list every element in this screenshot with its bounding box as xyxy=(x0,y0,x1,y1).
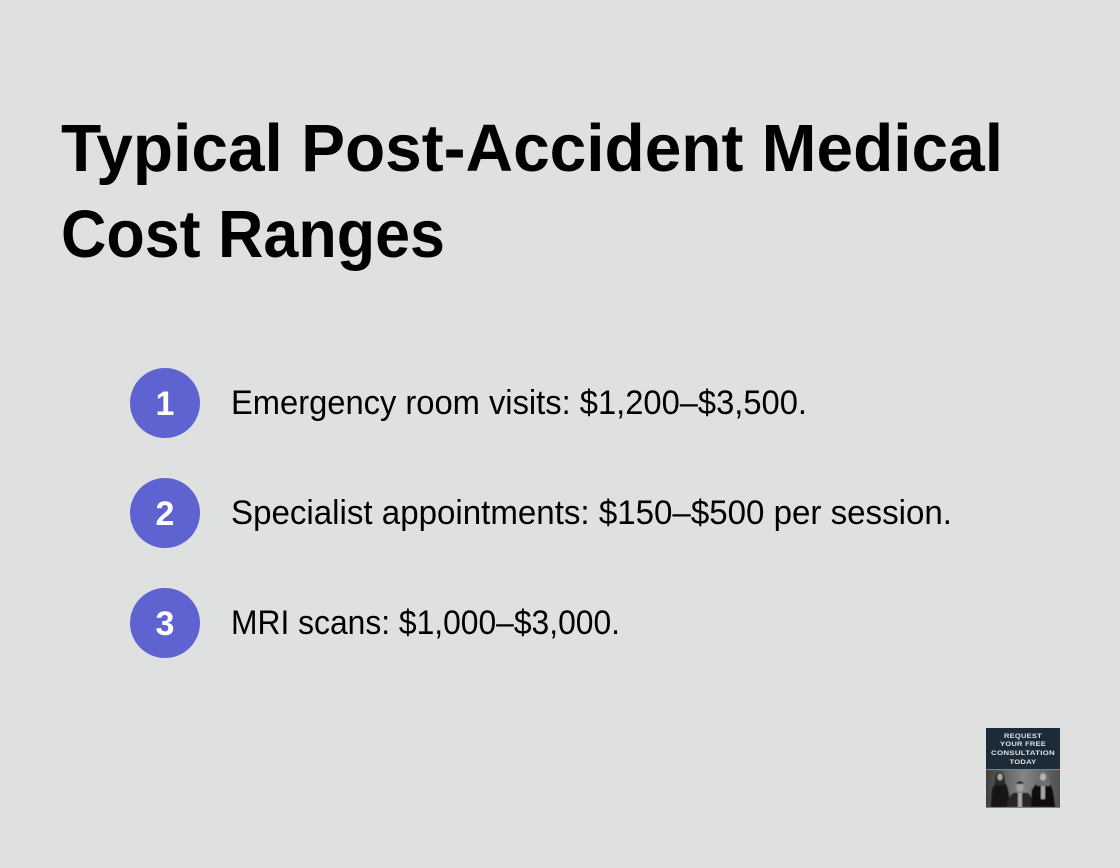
consultation banner xyxy=(986,728,1060,808)
banner text: TODAY xyxy=(1010,759,1037,766)
item text 1: Emergency room visits: $1,200–$3,500. xyxy=(231,384,807,422)
number badge 3: 3 xyxy=(156,605,174,643)
number badge 2 xyxy=(130,478,200,548)
banner text xyxy=(991,733,1055,766)
banner text: REQUEST xyxy=(1004,733,1042,740)
banner text: CONSULTATION xyxy=(991,750,1055,757)
number badge 1 xyxy=(130,368,200,438)
photo: three people xyxy=(991,771,1055,807)
list item 3: MRI scans xyxy=(130,588,620,658)
number badge 2: 2 xyxy=(156,495,174,533)
list item 1: emergency room xyxy=(130,368,807,438)
number badge 3 xyxy=(130,588,200,658)
title: Typical Post-Accident Medical xyxy=(61,111,1003,186)
item text 3: MRI scans: $1,000–$3,000. xyxy=(231,604,620,642)
list item 2: specialist appointments xyxy=(130,478,952,548)
title xyxy=(61,111,1003,272)
banner text: YOUR FREE xyxy=(1000,741,1046,748)
item text 2: Specialist appointments: $150–$500 per session. xyxy=(231,494,952,532)
title: Cost Ranges xyxy=(61,197,445,272)
number badge 1: 1 xyxy=(156,385,174,423)
